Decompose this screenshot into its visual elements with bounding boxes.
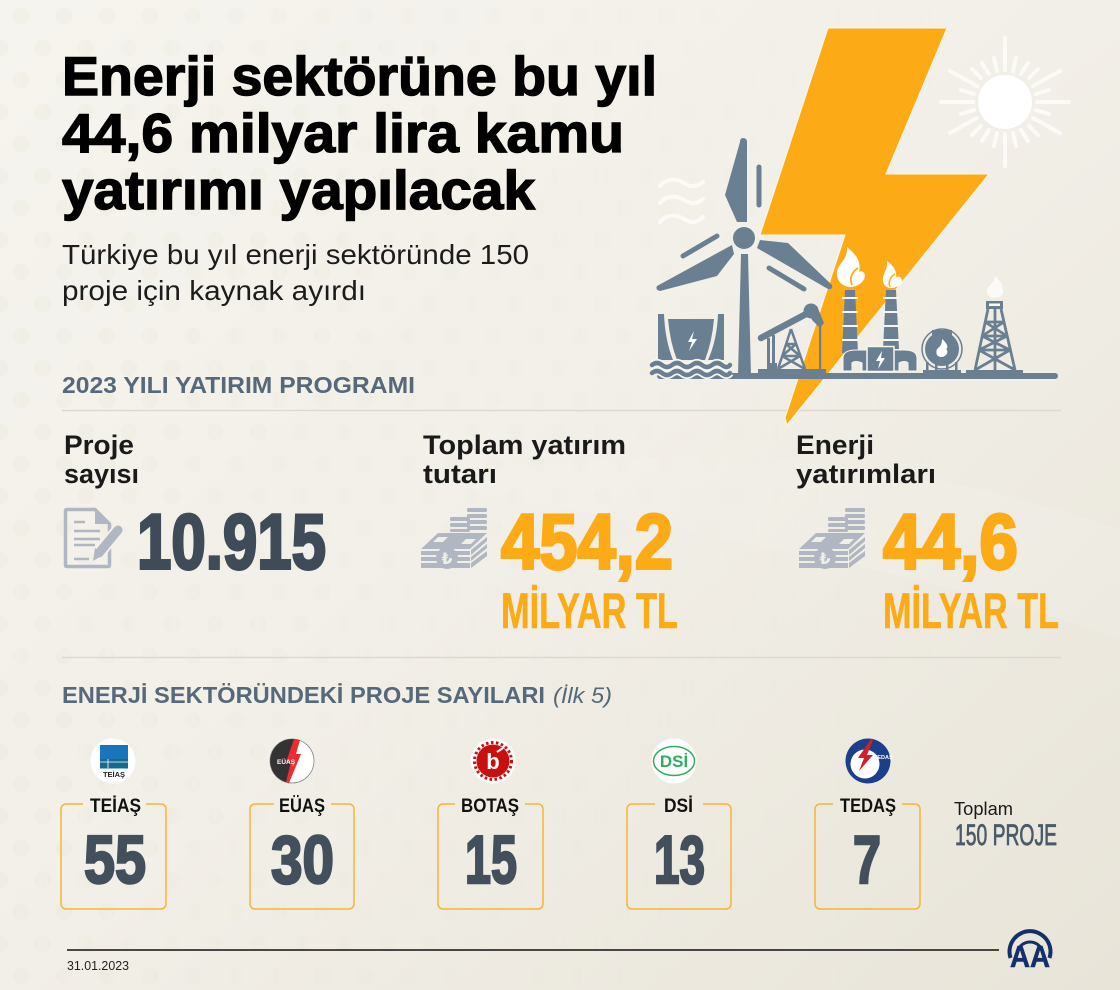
card: EÜAŞ	[250, 739, 354, 909]
number: 10.915: 10.915	[137, 498, 326, 586]
logo: TEİAŞ: TEİAŞ	[103, 770, 125, 779]
title	[62, 45, 657, 221]
icon: money stack: ₺	[819, 549, 831, 568]
card: DSİ	[627, 738, 731, 909]
icon: money stack	[799, 508, 865, 569]
icon: document and pencil	[66, 509, 118, 566]
logo: BOTAŞ	[470, 738, 516, 784]
label: DSİ: DSİ	[664, 796, 693, 817]
icon: oil derrick	[966, 301, 1023, 374]
section heading: investment programme: 2023 YILI YATIRIM PROGRAMI	[62, 372, 415, 398]
card: TEİAŞ	[61, 738, 166, 909]
stat: project count	[64, 430, 326, 586]
section heading: project counts: (İlk 5)	[553, 683, 612, 708]
subtitle: Türkiye bu yıl enerji sektöründe 150	[62, 239, 529, 270]
number: 30: 30	[271, 822, 334, 898]
label: energy investment	[796, 430, 936, 489]
label: total investment: Toplam yatırım	[423, 430, 626, 460]
label: total investment	[423, 430, 626, 489]
label: TEDAŞ: TEDAŞ	[840, 796, 896, 817]
total: 150 projects: Toplam	[954, 799, 1013, 819]
logo: BOTAŞ: b	[486, 749, 500, 774]
label: total investment: tutarı	[423, 459, 497, 489]
logo: DSİ: DSİ	[660, 752, 688, 771]
icon: gas tank	[922, 329, 962, 374]
subtitle: proje için kaynak ayırdı	[62, 275, 366, 306]
subtitle	[62, 239, 529, 306]
logo: DSİ	[652, 738, 696, 784]
icon: lightning bolt	[760, 28, 989, 425]
label: project count: Proje	[64, 430, 134, 460]
label: TEİAŞ: TEİAŞ	[90, 796, 141, 817]
label: energy investment: Enerji	[796, 430, 874, 460]
icon: chimneys	[842, 290, 899, 353]
logo: EÜAŞ: EÜAŞ	[277, 757, 296, 766]
icon: sun	[941, 38, 1069, 166]
background	[528, 618, 1120, 990]
ground line	[660, 373, 1055, 379]
label: BOTAŞ: BOTAŞ	[461, 796, 519, 817]
icon: money stack	[421, 508, 487, 569]
unit: milyar TL: MİLYAR TL	[501, 583, 678, 639]
stat: total investment	[421, 430, 678, 639]
illustration: energy facilities	[652, 138, 1055, 376]
number: 15: 15	[465, 822, 517, 898]
logo: Anadolu Agency: AA	[1010, 939, 1050, 974]
icon: dam	[652, 314, 730, 375]
stat: energy investment	[796, 430, 1059, 639]
icon: wind turbine	[656, 138, 832, 376]
title: Enerji sektörüne bu yıl	[62, 45, 657, 107]
title: yatırımı yapılacak	[62, 159, 535, 221]
icon: generator building	[843, 346, 917, 372]
total: 150 projects: 150 PROJE	[955, 819, 1057, 852]
logo: TEDAŞ	[846, 738, 893, 784]
title: 44,6 milyar lira kamu	[62, 102, 624, 164]
number: 13: 13	[654, 822, 705, 898]
number: 7: 7	[853, 822, 881, 898]
number: 55: 55	[84, 822, 146, 898]
label: project count: sayısı	[64, 459, 139, 489]
icon: oil pump	[758, 304, 826, 375]
label: EÜAŞ: EÜAŞ	[279, 796, 325, 817]
logo: TEDAŞ: TEDAŞ	[874, 755, 893, 761]
number: 454,2: 454,2	[501, 498, 673, 586]
number: 44,6: 44,6	[883, 498, 1018, 586]
card: BOTAŞ	[438, 738, 543, 909]
section heading: project counts: ENERJİ SEKTÖRÜNDEKİ PROJE SAYILARI	[62, 682, 545, 708]
date: 31.01.2023	[67, 958, 129, 973]
label: project count	[64, 430, 139, 489]
logo: EÜAŞ	[270, 739, 314, 783]
icon: flames	[837, 247, 1003, 298]
total: 150 projects	[954, 799, 1057, 852]
logo: TEİAŞ	[90, 738, 136, 784]
icon: wind lines	[660, 180, 703, 222]
card: TEDAŞ	[815, 738, 920, 909]
icon: money stack: ₺	[441, 549, 453, 568]
label: energy investment: yatırımları	[796, 459, 936, 489]
